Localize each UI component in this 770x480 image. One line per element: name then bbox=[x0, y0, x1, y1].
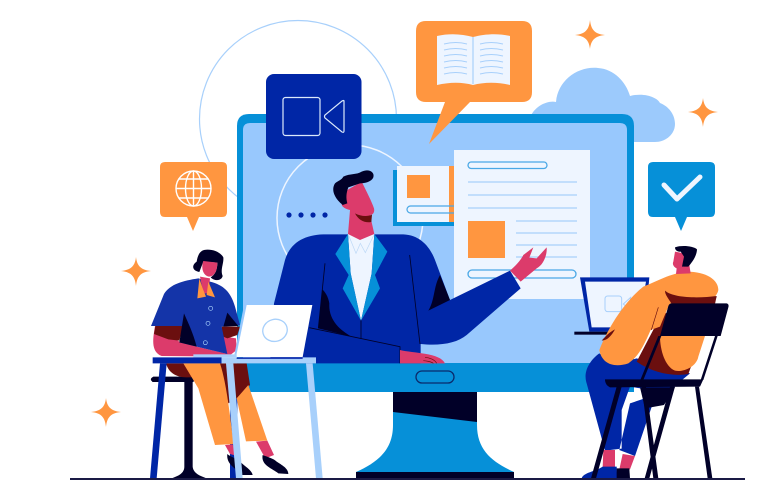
man sweater bbox=[599, 272, 718, 365]
presenter shadows bbox=[318, 275, 450, 337]
cloud bbox=[530, 68, 675, 142]
woman lower legs bbox=[225, 441, 274, 458]
presenter shirt bbox=[348, 234, 374, 321]
woman face bbox=[202, 261, 217, 277]
presenter hair bbox=[333, 170, 374, 205]
video call tile bbox=[266, 74, 362, 159]
typing dots bbox=[286, 212, 328, 218]
presenter raised hand bbox=[510, 247, 547, 282]
woman with laptop at desk bbox=[150, 250, 323, 478]
monitor bbox=[237, 114, 634, 392]
woman shirt bbox=[151, 278, 240, 354]
desk top bbox=[153, 357, 222, 363]
desk far leg bbox=[230, 363, 237, 478]
woman laptop bbox=[234, 305, 247, 355]
man shoes bbox=[582, 467, 617, 478]
man sweater folds bbox=[602, 291, 717, 341]
man hair bbox=[675, 246, 697, 267]
presenter hand on desk bbox=[400, 350, 445, 363]
woman arms bbox=[153, 326, 237, 357]
check speech bubble bbox=[648, 162, 715, 231]
orange sparkles bbox=[91, 20, 718, 427]
woman shoes bbox=[227, 454, 288, 475]
stool bbox=[151, 377, 207, 478]
small document card bbox=[393, 166, 457, 226]
presenter bbox=[270, 170, 547, 363]
woman hair bbox=[193, 250, 223, 280]
presenter smile bbox=[355, 213, 372, 222]
man face bbox=[673, 252, 684, 269]
man lower back sweater bbox=[660, 336, 705, 371]
presenter lapels bbox=[335, 234, 387, 321]
man socks bbox=[603, 450, 635, 469]
woman trousers bbox=[183, 363, 267, 445]
ground line bbox=[70, 478, 745, 480]
background ring bbox=[200, 20, 396, 218]
globe speech bubble bbox=[160, 162, 227, 231]
desk near legs bbox=[150, 363, 167, 478]
woman seat shadow bbox=[166, 363, 250, 403]
man back shadow bbox=[637, 297, 717, 375]
presenter jacket bbox=[270, 234, 521, 363]
man laptop bbox=[580, 277, 649, 332]
man neck bbox=[676, 265, 691, 274]
man chair bbox=[591, 303, 729, 478]
large document card bbox=[454, 150, 590, 299]
woman neck and collar bbox=[200, 277, 210, 293]
book speech bubble bbox=[416, 21, 532, 144]
presenter head and neck bbox=[342, 182, 374, 240]
man seated on chair with laptop bbox=[574, 246, 729, 478]
man trousers bbox=[586, 353, 690, 456]
monitor stand bbox=[356, 392, 514, 479]
